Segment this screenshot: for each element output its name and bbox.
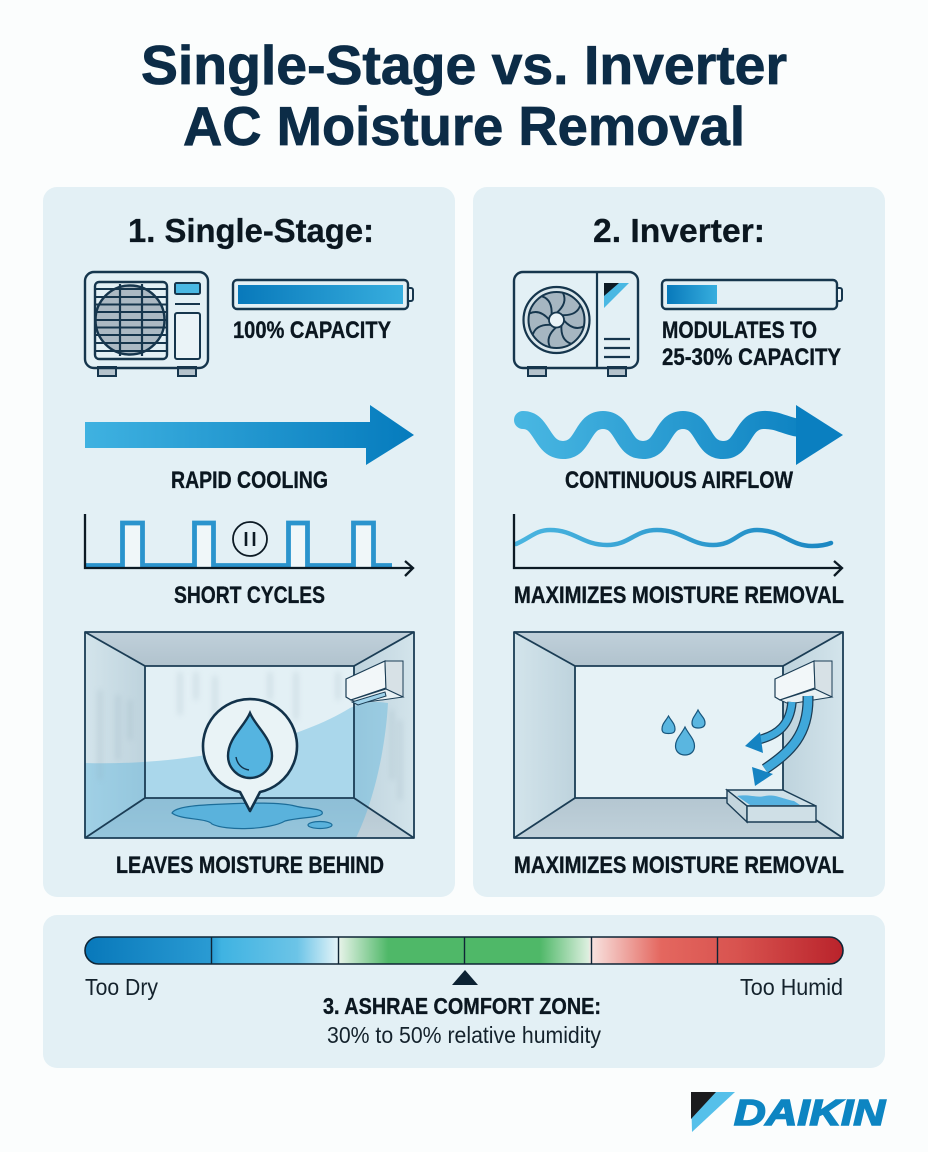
humidity scale bar xyxy=(85,937,843,964)
illustration: humid room xyxy=(85,632,414,838)
heading: single-stage: 1. Single-Stage: xyxy=(128,212,374,249)
icon: inverter outdoor unit xyxy=(514,272,638,376)
comfort zone range: 30% to 50% relative humidity xyxy=(327,1022,601,1048)
title: Single-Stage vs. Inverter xyxy=(141,34,787,96)
arrow: rapid cooling xyxy=(85,405,414,465)
label: continuous airflow: CONTINUOUS AIRFLOW xyxy=(565,467,793,494)
chart: steady humidity curve xyxy=(514,514,842,576)
heading: inverter: 2. Inverter: xyxy=(593,212,765,249)
puddle xyxy=(172,803,322,829)
label: maximizes moisture removal (chart): MAXIMIZES MOISTURE REMOVAL xyxy=(514,582,844,609)
label: modulates to 25-30% capacity: MODULATES TO xyxy=(662,317,817,344)
label: leaves moisture behind: LEAVES MOISTURE BEHIND xyxy=(116,852,384,879)
chart: short cycles xyxy=(85,514,413,576)
icon: full battery xyxy=(233,280,413,309)
label: too dry: Too Dry xyxy=(85,974,158,1000)
label: modulates to 25-30% capacity: 25-30% CAPACITY xyxy=(662,344,841,371)
label: maximizes moisture removal (room): MAXIMIZES MOISTURE REMOVAL xyxy=(514,852,844,879)
arrow: continuous airflow xyxy=(523,405,843,465)
label: short cycles: SHORT CYCLES xyxy=(174,582,325,609)
airflow arrows xyxy=(745,696,808,786)
wall AC unit xyxy=(346,661,403,705)
label: rapid cooling: RAPID COOLING xyxy=(171,467,328,494)
comfort zone heading: 3. ASHRAE COMFORT ZONE: xyxy=(323,993,601,1019)
icon: single-stage outdoor unit xyxy=(85,272,208,376)
label: modulates to 25-30% capacity xyxy=(662,317,841,371)
humid air swoosh xyxy=(85,702,388,838)
title xyxy=(141,34,787,157)
drain pan xyxy=(727,790,816,822)
logo: Daikin xyxy=(691,1092,886,1133)
panel: single-stage xyxy=(43,187,455,897)
wall condensation xyxy=(100,672,400,800)
logo: Daikin: DAIKIN xyxy=(734,1092,886,1133)
label: too humid: Too Humid xyxy=(740,974,843,1000)
illustration: dry room xyxy=(514,632,843,838)
wall AC unit xyxy=(775,661,832,704)
icon: part-filled battery xyxy=(662,280,842,309)
title: AC Moisture Removal xyxy=(183,95,745,157)
panel: ASHRAE comfort zone xyxy=(43,915,885,1068)
label: 100% capacity: 100% CAPACITY xyxy=(233,317,391,344)
bubble with water drop xyxy=(203,699,297,811)
panel: inverter xyxy=(473,187,885,897)
marker triangle xyxy=(452,970,478,985)
water drops xyxy=(662,710,705,755)
